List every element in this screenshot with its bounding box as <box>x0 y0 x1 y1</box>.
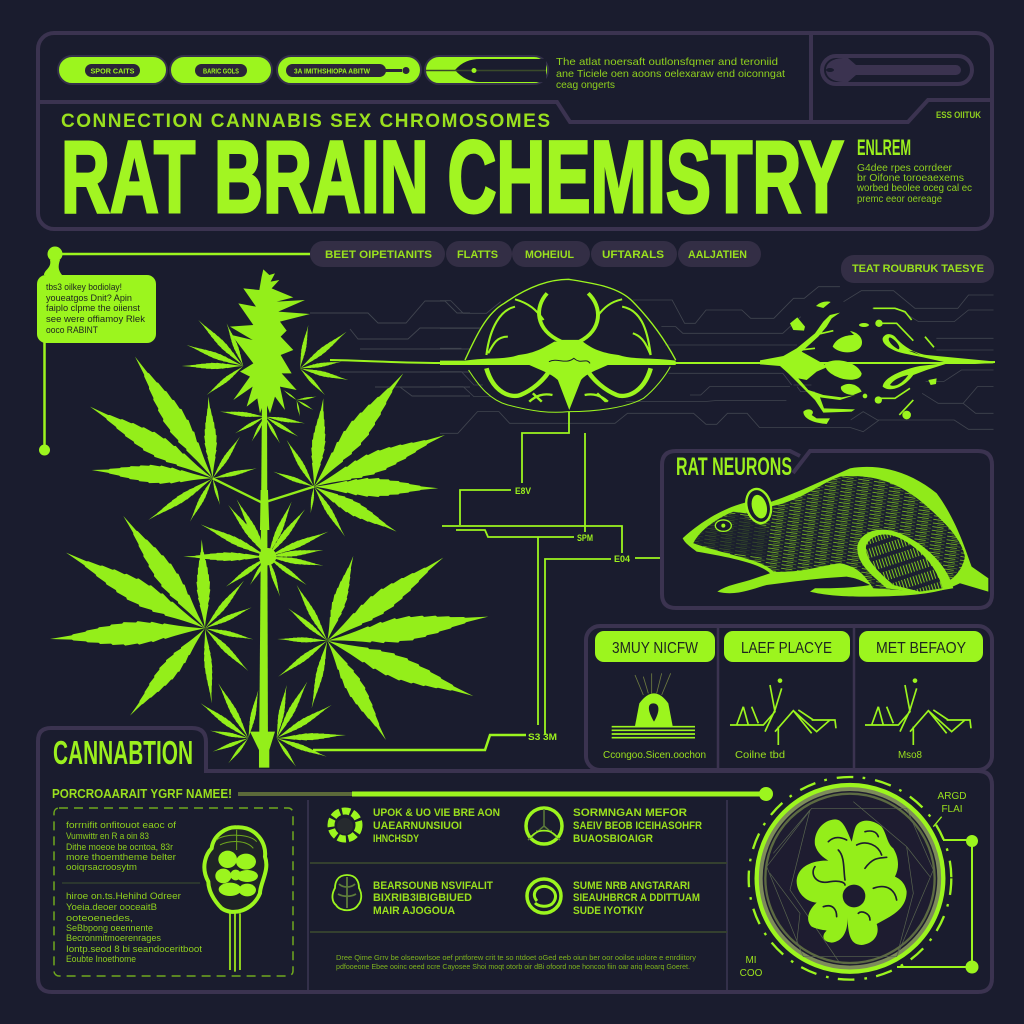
scope label bottom: MI <box>745 955 757 966</box>
feature text four <box>573 880 700 917</box>
icon: small brain with stem <box>204 827 266 972</box>
feature text four: SUME NRB ANGTARARI <box>573 880 690 892</box>
icon: neuron cell <box>331 811 359 839</box>
feature text four: SUDE IYOTKIY <box>573 905 645 917</box>
callout: tbs3 oilkey bodiolay! <box>46 282 122 293</box>
left body text: Iontp.seod 8 bi seandoceritboot <box>66 944 202 955</box>
leaf: upper left <box>85 351 263 523</box>
left body text: SeBbpong oeennente <box>66 923 153 934</box>
chip row <box>310 241 761 267</box>
scope label top <box>938 791 966 815</box>
wire: label to box <box>442 490 622 553</box>
left body text: ooteoenedes, <box>66 913 133 924</box>
left body text: more thoemtheme belter <box>66 852 176 863</box>
panel dividers <box>308 800 727 990</box>
panel: cannabis bottom section <box>38 728 992 992</box>
feature text one: UPOK & UO VIE BRE AON <box>373 807 500 819</box>
footer note text: Dree Qime Grrv be olseowrlsoe oef pntforew crit te so ntdoet oGed eeb oiun ber oor ooilse uolore e enrdiitory <box>336 953 696 962</box>
leaf: upper right <box>267 367 449 538</box>
wire: vertical branch <box>456 433 585 537</box>
feature text three: BIXRIB3IBIGBIUED <box>373 892 472 904</box>
feature text three: BEARSOUNB NSVIFALIT <box>373 880 493 892</box>
subheading: PORCROAARAIT YGRF NAMEE! <box>52 786 232 801</box>
card three: MET BEFAOY <box>876 640 966 657</box>
icon: circle scope <box>526 808 562 844</box>
left body text: Eoubte Inoethome <box>66 954 136 965</box>
feature text four: SIEAUHBRCR A DDITTUAM <box>573 892 700 904</box>
left body text: forrnifit onfitouot eaoc of <box>66 820 176 831</box>
header description text: ane Ticiele oen aoons oelexaraw end oiconngat <box>556 68 785 80</box>
scope label bottom <box>740 955 763 979</box>
scope label top: ARGD <box>938 791 966 802</box>
card two <box>724 631 850 761</box>
pill: second nav button <box>170 56 272 84</box>
circuit traces left of brain <box>310 301 480 396</box>
icon: rat illustration <box>683 467 988 597</box>
callout <box>37 246 310 456</box>
pill: fourth slider button <box>425 56 548 84</box>
card three: Mso8 <box>898 750 922 761</box>
left body text: Yoeia.deoer ooceaitB <box>66 902 157 913</box>
pill: second nav button: BARIC GOLS <box>203 68 239 76</box>
feature text one <box>373 807 500 845</box>
leaf: bottom <box>199 680 346 768</box>
chip: top right tag: TEAT ROUBRUK TAESYE <box>852 263 984 275</box>
axon line <box>330 360 995 363</box>
leaf: middle <box>183 490 330 597</box>
header side note <box>856 135 972 205</box>
connector bar <box>238 787 773 801</box>
panel: three cards <box>586 626 992 770</box>
pill: first nav button: SPOR CAITS <box>90 68 135 76</box>
wire labels: E04 <box>614 554 630 564</box>
icon: ring with embryo <box>527 879 561 913</box>
wire: plant to labels <box>538 537 678 735</box>
small header tag: ESS OIITUK <box>936 110 981 120</box>
feature text two <box>573 807 702 845</box>
header side note: br Oifone toroeaexems <box>857 173 964 184</box>
header side note: worbed beolee oceg cal ec <box>856 183 972 194</box>
wire labels <box>515 486 630 742</box>
wire labels: E8V <box>515 486 531 496</box>
chip row: BEET OIPETIANITS <box>325 249 432 261</box>
pill: first nav button <box>58 56 167 84</box>
pill: third nav button: 3A IMITHSHIOPA ABITW <box>294 68 370 76</box>
dendrite burst <box>760 301 993 424</box>
chip row: MOHEIUL <box>525 249 574 261</box>
big brain scope <box>749 777 951 980</box>
left body text: hiroe on.ts.Hehihd Odreer <box>66 891 181 902</box>
dashed text box <box>54 808 293 976</box>
chip: top right tag <box>841 255 994 283</box>
feature text three <box>373 880 493 917</box>
callout: ooco RABINT <box>46 325 98 336</box>
scope callout right <box>897 835 978 974</box>
card three <box>859 631 983 761</box>
left body text: Dithe moeoe be ocntoa, 83r <box>66 842 173 853</box>
card two: Coilne tbd <box>735 750 785 761</box>
panel: rat neurons <box>662 451 992 608</box>
feature text two: BUAOSBIOAIGR <box>573 833 653 845</box>
icon: wrench slider <box>822 56 972 84</box>
wire labels: S3 3M <box>528 732 557 742</box>
header description text: The atlat noersaft outlonsfqmer and teroniid <box>556 56 778 68</box>
icon: outlined brain <box>332 875 361 910</box>
wire labels: SPM <box>577 533 593 543</box>
feature text two: SORMNGAN MEFOR <box>573 807 687 819</box>
left body text: ooiqrsacroosytm <box>66 862 137 873</box>
header description text: ceag ongerts <box>556 79 615 91</box>
callout: faiplo clpme the oiienst <box>46 303 140 314</box>
chip row: FLATTS <box>457 249 498 261</box>
card one: 3MUY NICFW <box>612 640 699 657</box>
card one <box>595 631 715 761</box>
left body text <box>66 820 202 965</box>
scope label top: FLAI <box>941 804 963 815</box>
flower bud and crown leaves <box>182 269 349 444</box>
callout: youeatgos Dnit? Apin <box>46 293 132 304</box>
header panel frame <box>38 33 992 229</box>
chip row: UFTARALS <box>602 249 664 261</box>
feature text two: SAEIV BEOB ICEIHASOHFR <box>573 820 702 832</box>
header side note: premc eeor oereage <box>857 194 942 205</box>
header side note: G4dee rpes corrdeer <box>857 163 953 174</box>
feature text three: MAIR AJOGOUA <box>373 905 455 917</box>
subtitle: CONNECTION CANNABIS SEX CHROMOSOMES <box>61 111 550 132</box>
leaf: lower left <box>49 510 254 721</box>
header description text <box>556 56 785 91</box>
footer note text: pdfooeone Ebee ooinc oeed ocre Cayosee Shoi moqt otorb oir dBi ofoord noe honcoo fiin oar ariq Ieoarq Goeret. <box>336 962 690 971</box>
feature text one: IHNCHSDY <box>373 833 420 845</box>
left body text: Becronmitmoerenrages <box>66 933 161 944</box>
heading: RAT NEURONS <box>676 453 792 481</box>
stem <box>259 395 268 767</box>
footer note text <box>336 953 696 971</box>
wire: brain to label <box>522 412 569 483</box>
chip row: AALJATIEN <box>688 249 747 261</box>
heading: CANNABTION <box>53 734 193 771</box>
cannabis plant <box>49 269 490 768</box>
header side note: ENLREM <box>857 135 911 160</box>
brain neuron diagram <box>440 279 676 412</box>
leaf: lower right <box>276 549 490 744</box>
pill: third nav button <box>277 56 421 84</box>
wire: plant base connector <box>313 735 526 750</box>
card two: LAEF PLACYE <box>741 640 832 657</box>
callout: see were offiamoy Rlek <box>46 314 145 325</box>
feature text one: UAEARNUNSIUOI <box>373 820 462 832</box>
scope label bottom: COO <box>740 968 763 979</box>
left body text: Vumwittr en R a oin 83 <box>66 831 149 842</box>
card one: Ccongoo.Sicen.oochon <box>603 750 706 761</box>
circuit traces background <box>440 287 994 433</box>
